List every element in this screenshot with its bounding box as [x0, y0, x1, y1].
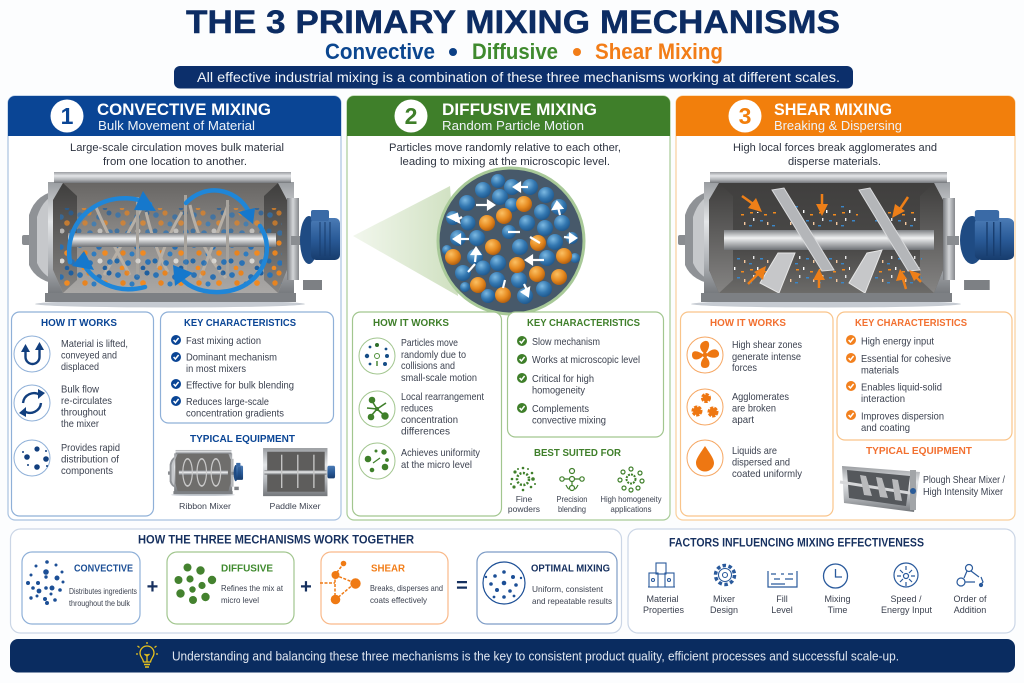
factor: speed energy: Speed /: [890, 594, 922, 604]
text: random motion: [401, 337, 477, 384]
subtitle: Shear Mixing: [595, 39, 723, 64]
box: how it works: HOW IT WORKS: [41, 317, 117, 329]
text: shear zones: forces: [732, 362, 757, 374]
header: diffusive: DIFFUSIVE MIXING: [442, 100, 597, 119]
text: random motion: Particles move: [401, 337, 458, 349]
text: agglomerates: [732, 391, 789, 426]
description: leading to mixing at the microscopic level.: [400, 156, 610, 168]
thumbnail: ribbon mixer: [168, 450, 243, 496]
box: key characteristics: convective mixing: [532, 414, 606, 426]
box: key characteristics: concentration gradients: [186, 408, 284, 420]
box: key characteristics: materials: [861, 364, 899, 376]
typical equipment: TYPICAL EQUIPMENT: [190, 433, 296, 445]
panel: shear mixing: [676, 96, 1015, 520]
factor: mixing time: [824, 564, 851, 615]
box: key characteristics: homogeneity: [532, 384, 586, 396]
intro banner: All effective industrial mixing is a combination of these three mechanisms working at different scales.: [197, 70, 840, 85]
panel: convective mixing: [8, 96, 341, 520]
text: agglomerates: Agglomerates: [732, 391, 789, 403]
card: convective: [22, 552, 140, 624]
label: fine powders: powders: [508, 504, 540, 514]
icon: precision blending: [560, 468, 584, 490]
icon: uniformity: [359, 443, 395, 479]
description: High local forces break agglomerates and: [733, 142, 937, 154]
text: recirculation: re-circulates: [61, 395, 112, 407]
box: how it works: HOW IT WORKS: [710, 317, 786, 329]
header: diffusive: 2: [405, 103, 417, 129]
factor: material properties: [643, 563, 685, 615]
header: diffusive: [347, 96, 670, 136]
panel: how the three mechanisms work together: HOW THE THREE MECHANISMS WORK TOGETHER: [138, 534, 415, 546]
card: shear: SHEAR: [371, 564, 406, 574]
typical equipment: Ribbon Mixer: [179, 502, 231, 511]
label: precision blending: blending: [558, 504, 586, 514]
typical equipment: [168, 433, 335, 511]
text: liquids: dispersed and: [732, 456, 790, 468]
box: key characteristics: in most mixers: [186, 363, 246, 375]
text: distribution: distribution of: [61, 454, 119, 466]
text: lift: [61, 338, 128, 373]
factor: order of addition: Addition: [954, 605, 986, 615]
text: rearrangement: differences: [401, 426, 450, 438]
factor: material properties: Properties: [643, 605, 685, 615]
factor: mixer design: Design: [710, 605, 738, 615]
text: recirculation: Bulk flow: [61, 384, 99, 396]
factor: fill level: Level: [771, 605, 793, 615]
card: optimal mixing: Uniform, consistent: [532, 585, 604, 594]
box: key characteristics: Improves dispersion: [861, 410, 944, 422]
label: precision blending: Precision: [556, 494, 588, 504]
title: THE 3 PRIMARY MIXING MECHANISMS: [186, 4, 840, 40]
icon: distribution: [14, 440, 50, 476]
label: plough mixer: Plough Shear Mixer /: [923, 474, 1005, 486]
subtitle: Diffusive: [472, 39, 558, 64]
box: key characteristics: KEY CHARACTERISTICS: [527, 317, 640, 329]
factor: material properties: Material: [646, 594, 679, 604]
box: key characteristics: Fast mixing action: [186, 335, 261, 347]
description: disperse materials.: [788, 156, 881, 168]
text: liquids: Liquids are: [732, 445, 777, 457]
card: optimal mixing: and repeatable results: [532, 597, 612, 606]
text: lift: Material is lifted,: [61, 338, 128, 350]
typical equipment: [840, 445, 1005, 512]
icon: high homogeneity: [618, 467, 644, 492]
text: distribution: components: [61, 465, 113, 477]
label: high homogeneity: High homogeneity: [600, 494, 662, 504]
factor: speed energy: [881, 563, 933, 615]
thumbnail: plough mixer: [840, 466, 920, 512]
text: rearrangement: concentration: [401, 414, 458, 426]
box: how it works: [12, 312, 154, 516]
box: how it works: [352, 312, 502, 516]
description: from one location to another.: [103, 156, 247, 168]
box: key characteristics: Critical for high: [532, 373, 594, 385]
subtitle: [325, 39, 723, 64]
text: distribution: Provides rapid: [61, 442, 120, 454]
box: key characteristics: KEY CHARACTERISTICS: [184, 317, 296, 329]
description: [733, 142, 937, 168]
label: plough mixer: [923, 474, 1005, 498]
box: how it works: [680, 312, 833, 516]
compression arrows: [742, 194, 921, 289]
panel: how the three mechanisms work together: [10, 529, 622, 633]
card: shear: [320, 552, 448, 624]
box: key characteristics: interaction: [861, 393, 905, 405]
header: shear: SHEAR MIXING: [774, 100, 892, 119]
plus: +: [147, 576, 158, 598]
card: optimal mixing: OPTIMAL MIXING: [531, 564, 610, 574]
card: shear: Breaks, disperses and: [370, 584, 443, 593]
card: diffusive: DIFFUSIVE: [221, 564, 273, 574]
box: key characteristics: Essential for cohesive: [861, 353, 951, 365]
icon: recirculation: [14, 385, 50, 421]
footer banner: Understanding and balancing these three mechanisms is the key to consistent product quality, efficient processes and successful scale-up.: [172, 650, 899, 664]
card: diffusive: [167, 552, 294, 624]
plough shear mixer illustration: [678, 172, 1014, 308]
text: shear zones: generate intense: [732, 351, 801, 363]
text: random motion: randomly due to: [401, 349, 466, 361]
plus: +: [300, 576, 312, 598]
label: plough mixer: High Intensity Mixer: [923, 486, 1003, 498]
icon: rearrangement: [359, 391, 395, 427]
label: fine powders: [508, 494, 540, 514]
text: recirculation: the mixer: [61, 418, 99, 430]
panel: diffusive mixing: [347, 96, 670, 520]
text: rearrangement: [401, 391, 484, 438]
box: key characteristics: High energy input: [861, 336, 934, 348]
description: [70, 142, 284, 168]
text: agglomerates: are broken: [732, 402, 776, 414]
factor: mixer design: Mixer: [713, 594, 735, 604]
box: key characteristics: and coating: [861, 422, 910, 434]
equals: =: [456, 575, 468, 597]
box: key characteristics: Works at microscopic level: [532, 354, 640, 366]
header: convective: Bulk Movement of Material: [98, 118, 255, 133]
text: agglomerates: apart: [732, 414, 754, 426]
text: rearrangement: reduces: [401, 402, 433, 414]
text: random motion: small-scale motion: [401, 372, 477, 384]
box: key characteristics: [837, 312, 1012, 440]
label: fine powders: Fine: [516, 494, 533, 504]
circulation arrows: [69, 190, 267, 292]
label: high homogeneity: [600, 494, 662, 514]
card: diffusive: Refines the mix at: [221, 584, 284, 593]
factor: mixing time: Mixing: [824, 594, 851, 604]
text: uniformity: [401, 447, 481, 471]
best suited for: [508, 447, 662, 514]
header: convective: CONVECTIVE MIXING: [97, 100, 271, 119]
card: convective: throughout the bulk: [69, 599, 131, 608]
footer banner: [10, 639, 1015, 672]
factor: mixer design: [710, 566, 738, 615]
icon: fine powders: [510, 467, 536, 491]
thumbnail: paddle mixer: [263, 448, 335, 496]
icon: light bulb: [136, 642, 158, 667]
typical equipment: Paddle Mixer: [270, 502, 321, 511]
text: lift: displaced: [61, 361, 99, 373]
card: convective: Distributes ingredients: [69, 587, 137, 596]
label: high homogeneity: applications: [610, 504, 652, 514]
intro banner: [174, 66, 853, 88]
box: how it works: HOW IT WORKS: [373, 317, 449, 329]
description: [389, 142, 621, 168]
header: shear: 3: [739, 103, 751, 129]
text: liquids: [732, 445, 803, 480]
factor: order of addition: Order of: [953, 594, 987, 604]
factor: mixing time: Time: [828, 605, 847, 615]
text: recirculation: [61, 384, 112, 430]
typical equipment: TYPICAL EQUIPMENT: [866, 445, 973, 457]
icon: fan: [687, 337, 723, 373]
description: Large-scale circulation moves bulk material: [70, 142, 284, 154]
text: recirculation: throughout: [61, 406, 106, 418]
box: key characteristics: Complements: [532, 403, 589, 415]
label: precision blending: [556, 494, 588, 514]
box: key characteristics: Enables liquid-solid: [861, 382, 942, 394]
card: convective: CONVECTIVE: [74, 564, 133, 574]
zoom cone: [353, 186, 458, 296]
card: diffusive: micro level: [221, 596, 259, 605]
subtitle: Convective: [325, 39, 435, 64]
header: convective: [8, 96, 341, 136]
factor: speed energy: Energy Input: [881, 605, 933, 615]
panel: factors influencing mixing effectiveness: FACTORS INFLUENCING MIXING EFFECTIVENESS: [669, 538, 924, 550]
card: shear: coats effectively: [370, 596, 428, 605]
text: uniformity: at the micro level: [401, 459, 472, 471]
header: diffusive: Random Particle Motion: [442, 118, 584, 133]
box: key characteristics: Slow mechanism: [532, 336, 600, 348]
magnified particle view: [438, 168, 584, 314]
header: shear: Breaking & Dispersing: [774, 118, 902, 133]
header: shear: [676, 96, 1015, 136]
text: lift: conveyed and: [61, 350, 117, 362]
box: key characteristics: [508, 312, 664, 437]
text: shear zones: [732, 339, 802, 374]
text: shear zones: High shear zones: [732, 339, 802, 351]
text: rearrangement: Local rearrangement: [401, 391, 484, 403]
icon: liquid drop: [687, 440, 723, 476]
box: key characteristics: Effective for bulk blending: [186, 380, 294, 392]
box: key characteristics: Dominant mechanism: [186, 352, 277, 364]
header: convective: 1: [61, 103, 74, 129]
text: uniformity: Achieves uniformity: [401, 447, 481, 459]
factor: fill level: [768, 571, 797, 615]
text: distribution: [61, 442, 120, 477]
description: Particles move randomly relative to each other,: [389, 142, 621, 154]
card: optimal mixing: [477, 552, 617, 624]
icon: random dots: [359, 338, 395, 374]
text: random motion: collisions and: [401, 360, 455, 372]
box: key characteristics: KEY CHARACTERISTICS: [855, 317, 967, 329]
icon: lift arrows: [14, 336, 50, 372]
box: key characteristics: Reduces large-scale: [186, 396, 269, 408]
text: liquids: coated uniformly: [732, 468, 803, 480]
icon: agglomerates: [687, 389, 723, 425]
ribbon mixer illustration: [22, 172, 340, 308]
best suited for: BEST SUITED FOR: [534, 447, 621, 459]
box: key characteristics: [160, 312, 334, 423]
factor: order of addition: [953, 564, 987, 615]
panel: factors influencing mixing effectiveness: [628, 529, 1015, 633]
factor: fill level: Fill: [776, 594, 788, 604]
